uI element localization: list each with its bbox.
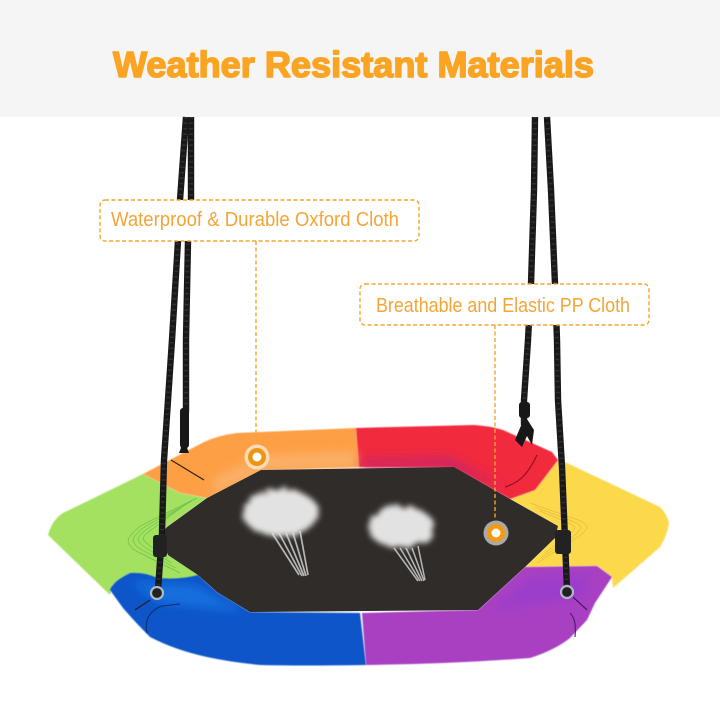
red panel	[356, 425, 558, 499]
back ropes to top knots	[184, 117, 535, 448]
yellow panel	[510, 460, 669, 588]
callout: pp cloth	[360, 284, 649, 546]
quilted stitching	[128, 498, 197, 573]
air streaks	[272, 531, 308, 576]
marker	[484, 520, 508, 546]
title: Weather Resistant Materials	[113, 44, 594, 85]
swing seat	[48, 425, 669, 666]
blue panel	[110, 573, 366, 666]
air streaks	[394, 546, 425, 581]
label text: Waterproof & Durable Oxford Cloth	[111, 209, 399, 231]
purple panel	[362, 566, 612, 665]
icon: air flowing through left	[243, 489, 319, 576]
dark mesh centre	[160, 467, 558, 612]
seam folds	[135, 455, 587, 637]
icon: air flowing through right	[368, 506, 434, 581]
hardware: knots and grommets	[151, 402, 573, 599]
fluff cloud	[368, 506, 434, 548]
callout: oxford cloth	[100, 200, 419, 470]
front ropes	[158, 117, 567, 590]
label box	[360, 284, 649, 325]
orange panel	[143, 428, 359, 498]
label text: Breathable and Elastic PP Cloth	[376, 295, 630, 317]
green panel	[48, 474, 207, 595]
fabric shading	[130, 452, 590, 612]
marker	[244, 444, 270, 470]
label box	[100, 200, 419, 241]
title band	[0, 0, 720, 117]
leader line	[494, 325, 496, 520]
leader line	[255, 241, 257, 445]
fluff cloud	[243, 489, 319, 537]
